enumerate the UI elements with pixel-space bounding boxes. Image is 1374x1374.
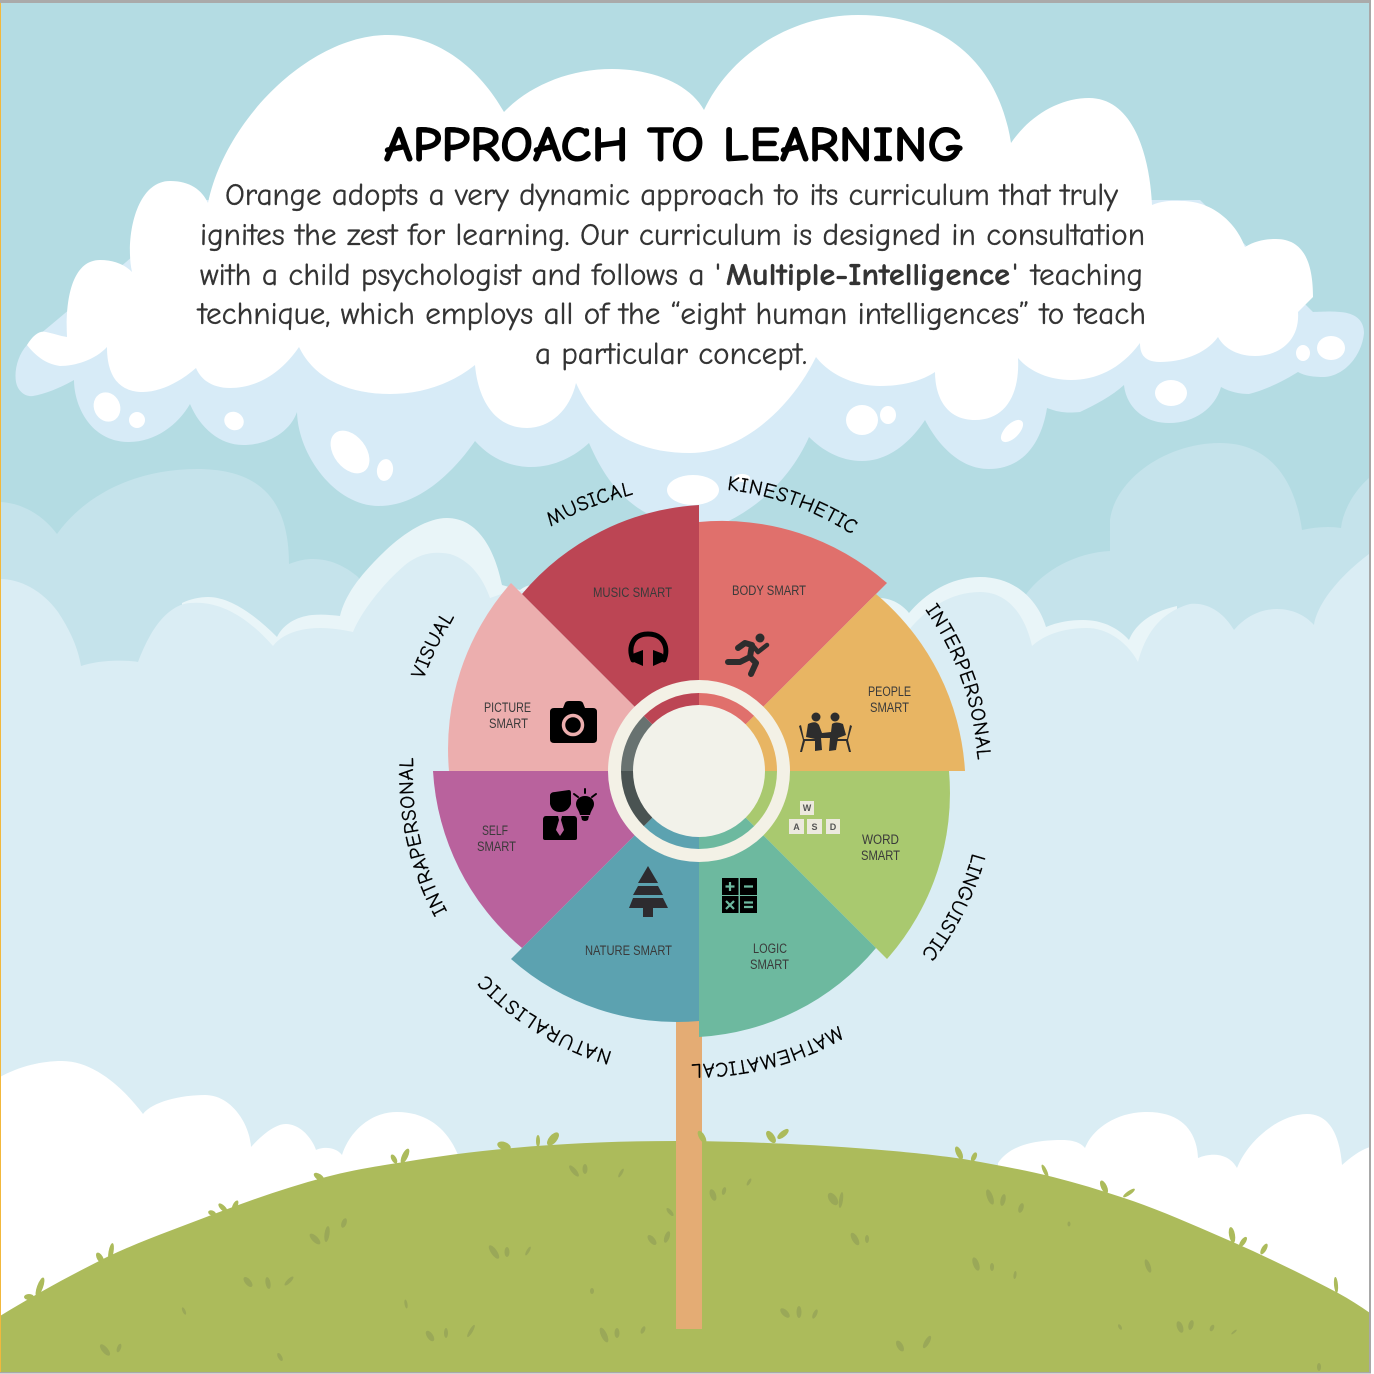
sector labels: SMART (861, 848, 900, 863)
sector labels: SELF (482, 823, 508, 838)
sector labels: MUSIC SMART (593, 585, 672, 600)
curved category labels (398, 476, 991, 1078)
sector: self smart (433, 771, 699, 948)
body text: ignites the zest for learning. Our curriculum is designed in consultation (200, 217, 1145, 253)
sector labels: SMART (870, 700, 909, 715)
body text: teaching (1029, 257, 1143, 293)
grass specks on hill (98, 1164, 1321, 1371)
sector labels: LOGIC (753, 941, 787, 956)
sector labels: PICTURE (484, 700, 531, 715)
lower light cloud layer (0, 553, 1369, 1200)
bottom white clouds (0, 1061, 1370, 1330)
cloud highlights (89, 336, 1345, 505)
sector labels: SMART (477, 839, 516, 854)
icon: people at table (799, 712, 852, 752)
curved category labels: KINESTHETIC (728, 476, 858, 533)
curved category labels: VISUAL (410, 616, 454, 676)
sector: nature smart (511, 771, 699, 1022)
outer cream ring (608, 680, 790, 862)
icon: wasd keys: W (803, 803, 812, 813)
curved category labels: LINGUISTIC (923, 854, 986, 961)
white main cloud (27, 15, 1313, 453)
icon: self with lightbulb (543, 789, 596, 840)
curved category labels: INTERPERSONAL (926, 602, 991, 760)
icon: wasd keys: D (830, 822, 837, 832)
rim cloud highlight (182, 518, 1177, 800)
sector labels: SMART (750, 957, 789, 972)
sector labels: SMART (489, 716, 528, 731)
sector labels: NATURE SMART (585, 943, 672, 958)
sector: logic smart (699, 771, 876, 1037)
sector labels (477, 583, 911, 972)
hill (0, 1141, 1370, 1372)
grass tufts on hill edge (24, 1127, 1339, 1300)
body text: technique, which employs all of the “eight human intelligences” to teach (196, 296, 1146, 332)
sector labels: PEOPLE (868, 684, 911, 699)
sector: people smart (699, 594, 965, 771)
body text: with a child psychologist and follows a ' (200, 257, 721, 293)
body text (196, 177, 1146, 372)
inner coloured ring (621, 693, 777, 849)
sector: word smart (699, 771, 950, 959)
sector: music smart (522, 505, 699, 771)
curved category labels: MATHEMATICAL (692, 1026, 842, 1078)
centre disc (633, 705, 765, 837)
sector: picture smart (448, 583, 699, 771)
icon: headphones (631, 634, 666, 666)
mid cloud layer (0, 443, 1369, 800)
icon: wasd keys (789, 801, 840, 834)
title: APPROACH TO LEARNING (384, 116, 964, 174)
stem (676, 1015, 702, 1329)
sector labels: BODY SMART (732, 583, 806, 598)
body text: a particular concept. (535, 336, 807, 372)
icon: wasd keys: A (793, 822, 800, 832)
curved category labels: MUSICAL (547, 482, 633, 526)
sector: body smart (699, 521, 887, 771)
icon: runner (728, 634, 767, 674)
icon: tree (629, 866, 668, 917)
curved category labels: INTRAPERSONAL (398, 758, 447, 917)
cloud shadow (15, 200, 1364, 525)
body text: Orange adopts a very dynamic approach to its curriculum that truly (225, 177, 1118, 213)
icon: calculator (722, 878, 757, 913)
wheel (433, 505, 965, 1037)
body text: ' (1012, 257, 1018, 293)
sector labels: WORD (862, 832, 899, 847)
curved category labels: NATURALISTIC (478, 976, 611, 1065)
body text: Multiple-Intelligence (726, 257, 1010, 293)
icon: camera (550, 701, 597, 743)
icon: wasd keys: S (811, 822, 818, 832)
